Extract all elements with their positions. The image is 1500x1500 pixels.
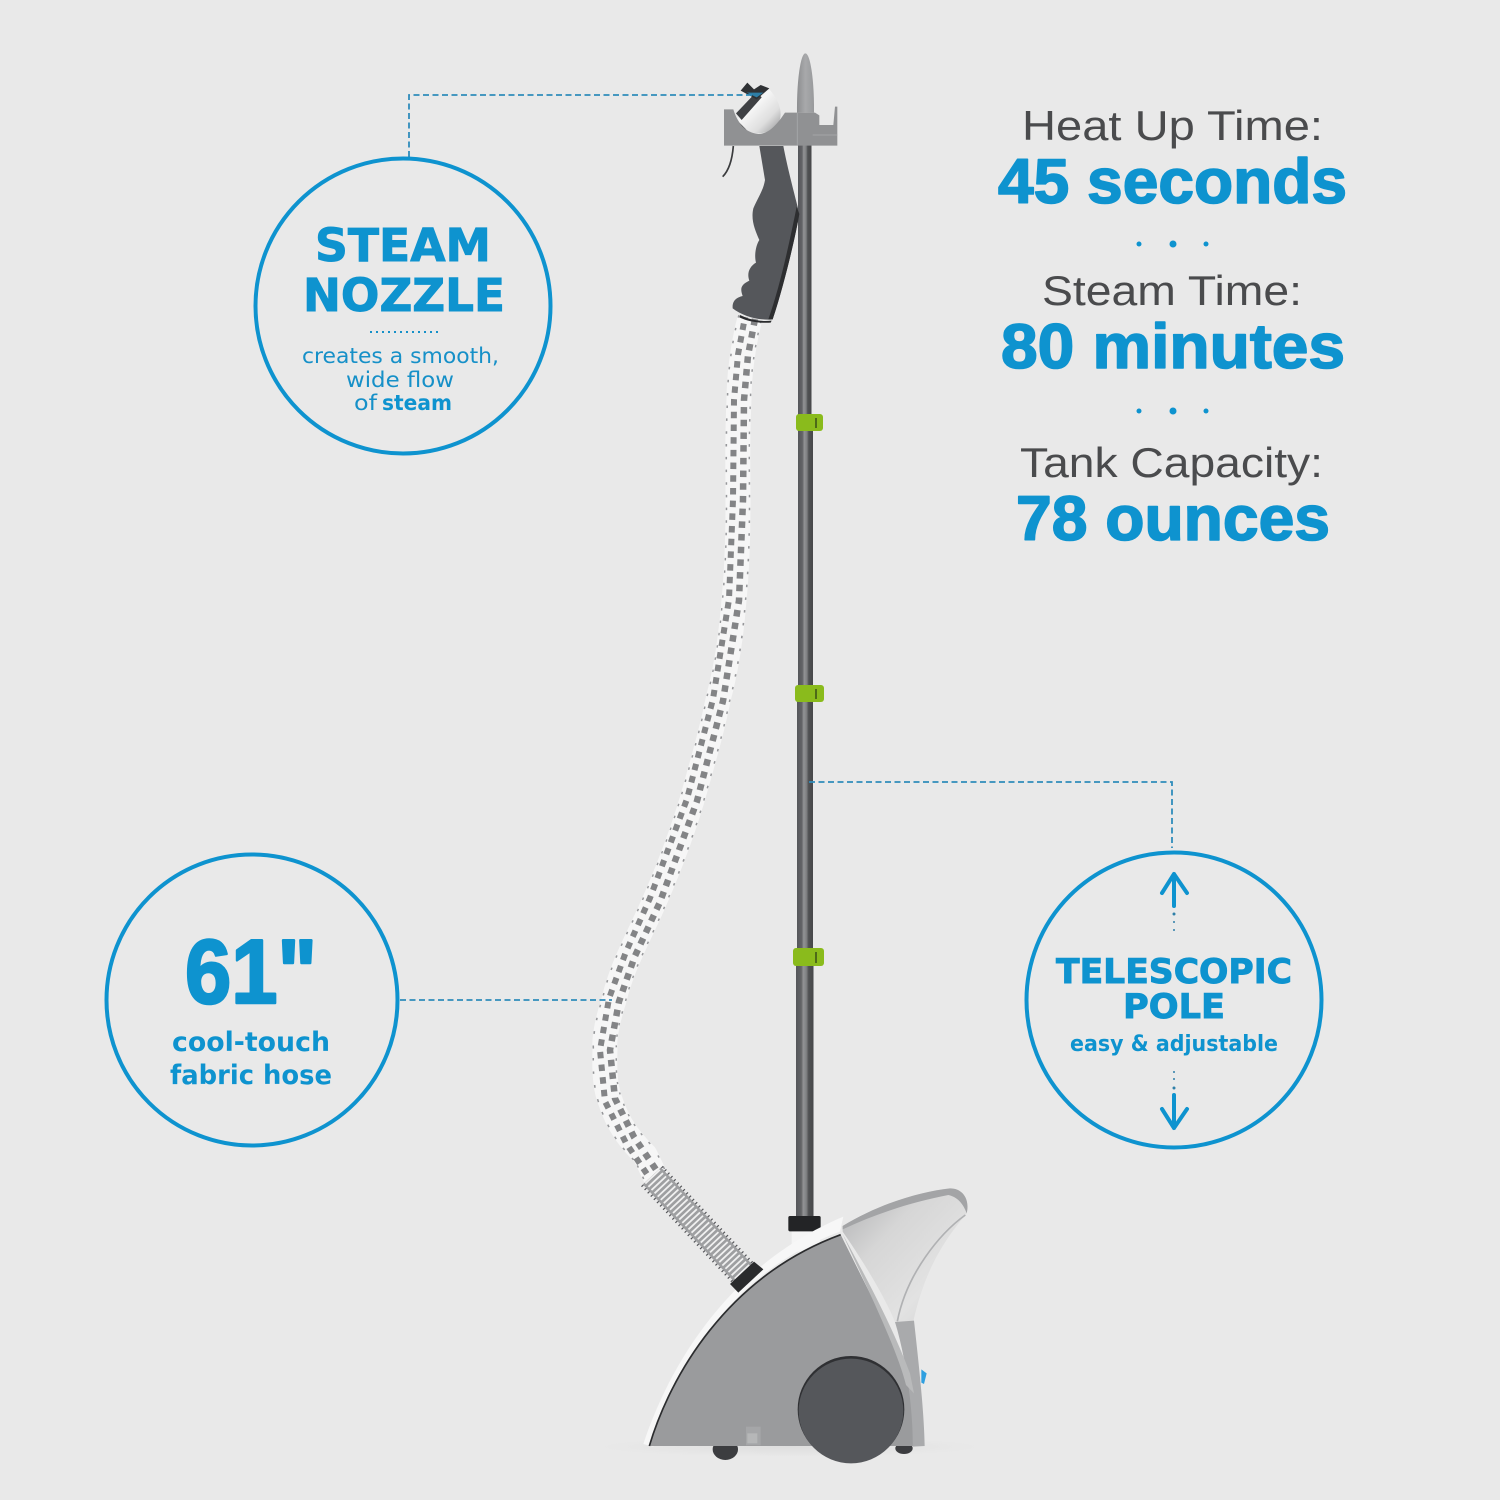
steamer pole bbox=[796, 140, 814, 1218]
nozzle head bbox=[737, 88, 781, 133]
separator dots bbox=[1136, 408, 1208, 414]
grey body bbox=[649, 1235, 923, 1446]
steam head and handle bbox=[723, 53, 837, 323]
circle callout: steam nozzle: STEAM bbox=[315, 219, 491, 272]
spec: steam time bbox=[1001, 267, 1345, 382]
spec: heat up time bbox=[998, 102, 1347, 217]
dots below bbox=[1172, 1071, 1176, 1090]
clip bbox=[746, 1427, 761, 1445]
circle callout: steam nozzle: wide flow bbox=[346, 368, 454, 393]
white shell bbox=[643, 1217, 843, 1447]
leader line: steam nozzle bbox=[409, 95, 752, 157]
tank neck bbox=[895, 1321, 925, 1447]
spec: tank capacity bbox=[1016, 439, 1330, 554]
hose connector bbox=[730, 1262, 763, 1293]
circle callout: steam nozzle bbox=[256, 158, 550, 454]
separator dots bbox=[1136, 240, 1208, 248]
steamer base bbox=[643, 1188, 968, 1463]
circle callout: steam nozzle: creates a smooth, bbox=[302, 344, 499, 369]
leader line: hose bbox=[400, 999, 612, 1001]
circle callout: hose length bbox=[106, 854, 398, 1146]
water tank bbox=[843, 1188, 968, 1322]
circle callout: telescopic pole: easy & adjustable bbox=[1070, 1032, 1278, 1057]
hose pattern left row bbox=[600, 317, 745, 1183]
spec: heat up time: Heat Up Time: bbox=[1022, 102, 1323, 149]
pole top spike bbox=[797, 53, 814, 113]
handle grip bbox=[733, 146, 799, 320]
circle callout: hose length: cool-touch bbox=[172, 1027, 330, 1058]
circle callout: telescopic pole bbox=[1026, 852, 1322, 1148]
floor shadow bbox=[600, 1437, 980, 1457]
circle callout: steam nozzle: of bbox=[354, 391, 377, 416]
body highlight bbox=[843, 1234, 914, 1393]
circle callout: hose length: fabric hose bbox=[170, 1060, 332, 1091]
nozzle holder bbox=[724, 107, 837, 146]
spec: heat up time: 45 seconds bbox=[998, 147, 1347, 217]
arrow down bbox=[1162, 1095, 1187, 1128]
spec: tank capacity: 78 ounces bbox=[1016, 484, 1330, 554]
circle callout: telescopic pole: POLE bbox=[1123, 987, 1225, 1027]
spec: tank capacity: Tank Capacity: bbox=[1020, 439, 1323, 486]
arrow up bbox=[1162, 874, 1187, 906]
wheel bbox=[798, 1356, 904, 1463]
circle callout: hose length: 61" bbox=[185, 922, 317, 1023]
hose collar bbox=[739, 315, 772, 323]
hose pattern right row bbox=[610, 319, 755, 1177]
fabric hose bbox=[600, 317, 755, 1183]
blue button bbox=[921, 1369, 927, 1384]
circle callout: steam nozzle: NOZZLE bbox=[303, 269, 505, 322]
circle callout: steam nozzle: steam bbox=[382, 391, 452, 416]
circle callout: telescopic pole: TELESCOPIC bbox=[1056, 952, 1292, 992]
height clips on pole bbox=[793, 414, 824, 966]
feet bbox=[713, 1439, 738, 1460]
pole collar bbox=[792, 1228, 820, 1252]
spec: steam time: Steam Time: bbox=[1042, 267, 1302, 314]
dots above bbox=[1172, 912, 1176, 931]
leader line: telescopic pole bbox=[809, 782, 1172, 848]
power cord bbox=[723, 146, 733, 177]
corrugated hose section bbox=[652, 1176, 745, 1275]
spec: steam time: 80 minutes bbox=[1001, 312, 1345, 382]
